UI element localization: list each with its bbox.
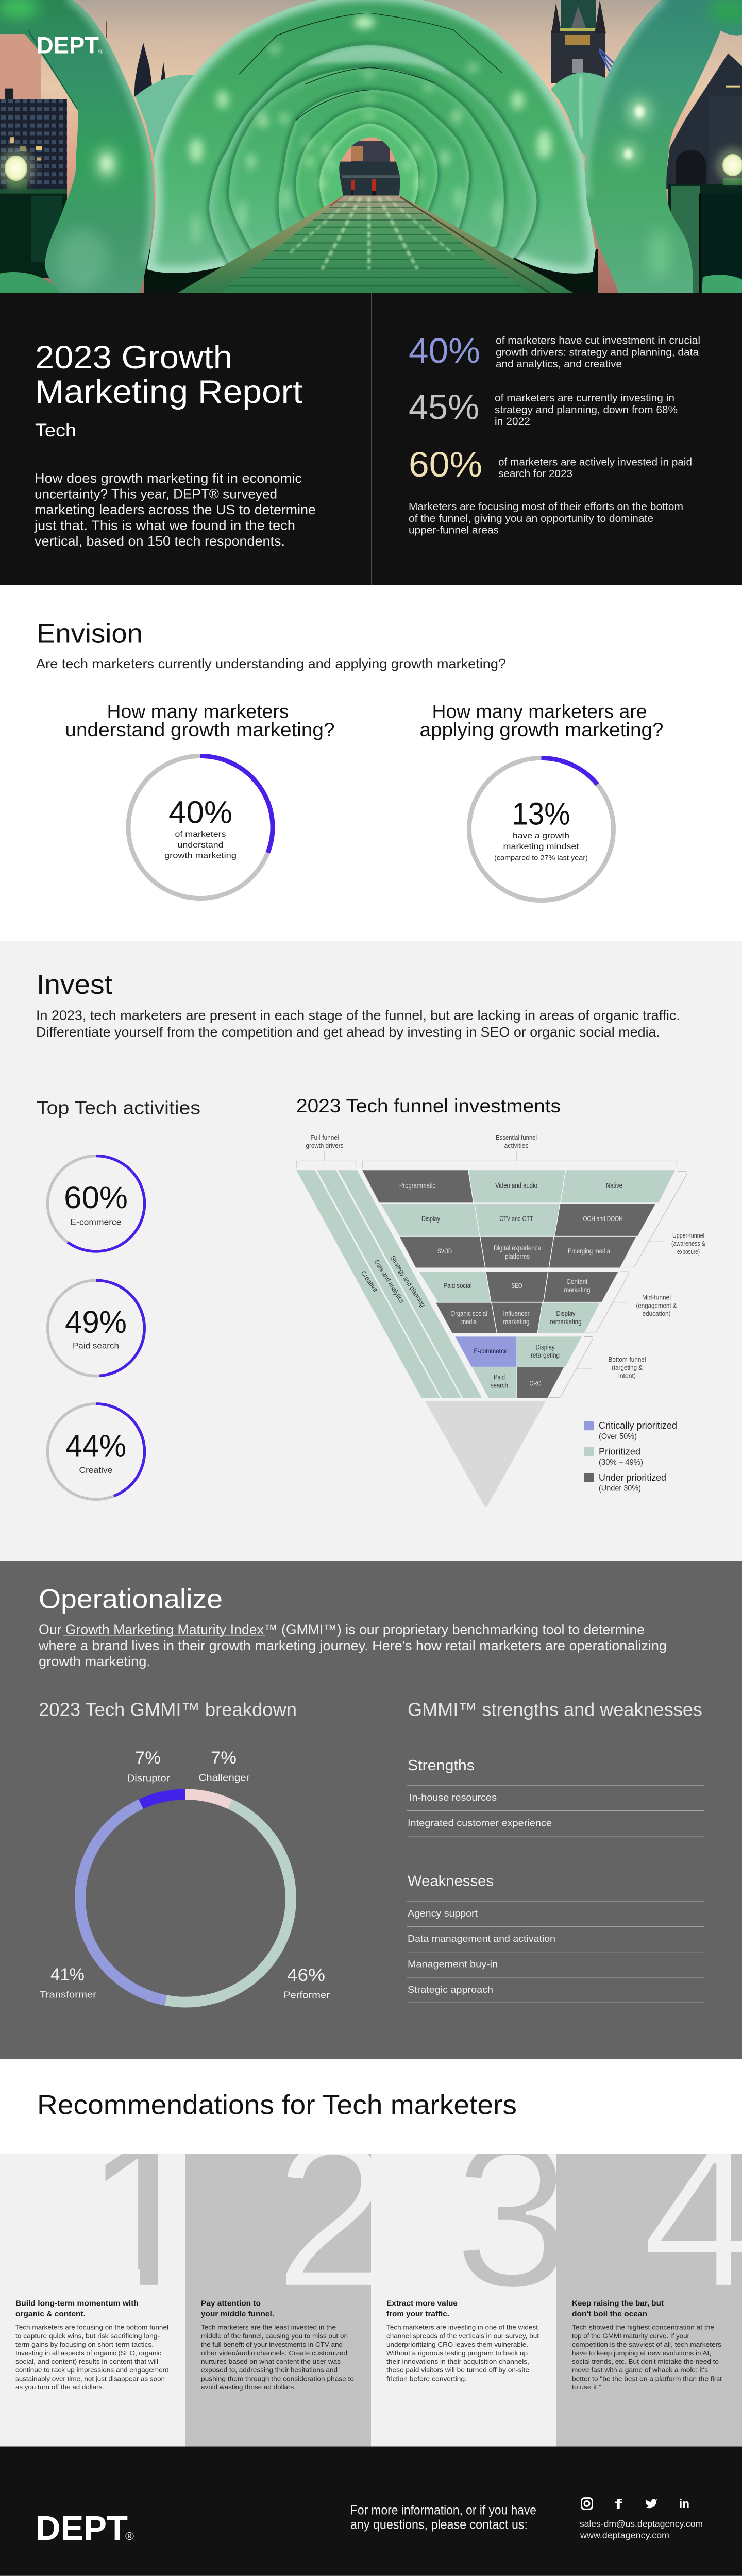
funnel top labels: growth drivers: [306, 1142, 343, 1149]
donut labels: 46%: [287, 1965, 325, 1985]
cell labels on light: Paid social: [443, 1281, 472, 1290]
hero logo: ®: [98, 49, 103, 55]
recommendation 1: sustainably over time, not just disappear as soon: [15, 2375, 165, 2382]
section intro: Are tech marketers currently understanding and applying growth marketing?: [36, 657, 506, 671]
icon: linkedin: in: [679, 2497, 689, 2511]
funnel top labels: [306, 1133, 537, 1149]
cell labels on light: search: [491, 1381, 508, 1389]
recommendation 2: pushing them through the consideration phase to: [201, 2375, 354, 2382]
funnel side labels: (targeting &: [612, 1364, 643, 1371]
cell labels on dark: SVOD: [437, 1247, 452, 1255]
cell labels on light: Display: [421, 1214, 440, 1223]
stat: 60%: [409, 444, 692, 484]
funnel top labels: Essential funnel: [496, 1133, 537, 1141]
subheading: strengths and weaknesses: GMMI™ strengths and weaknesses: [408, 1699, 702, 1720]
critically prioritized cell: [455, 1336, 516, 1367]
intro paragraph: just that. This is what we found in the tech: [34, 519, 295, 533]
walkway: [178, 196, 573, 293]
recommendation 1: organic & content.: [15, 2310, 86, 2318]
progress ring: creative 44%: Creative: [79, 1465, 112, 1475]
funnel side labels: education): [642, 1310, 670, 1317]
recommendation 2: Pay attention to: [201, 2299, 261, 2308]
hero logo: DEPT: [37, 32, 99, 58]
section intro: In 2023, tech marketers are present in each stage of the funnel, but are lacking in areas of organic traffic.: [36, 1008, 680, 1023]
donut labels: Disruptor: [127, 1773, 170, 1784]
takeaway text: of the funnel, giving you an opportunity to dominate: [409, 513, 653, 524]
cell labels on light: Video and audio: [495, 1181, 537, 1190]
takeaway text: [409, 501, 683, 536]
funnel side labels: intent): [618, 1372, 636, 1380]
heading: Envision: [37, 618, 143, 649]
donut labels: 7%: [135, 1748, 161, 1768]
chart heading: applying: [419, 701, 664, 740]
recommendation 3: Tech marketers are investing in one of the widest: [386, 2324, 538, 2331]
subheading: funnel: 2023 Tech funnel investments: [296, 1095, 561, 1116]
recommendation 1: social, and content) results in content that will: [15, 2358, 158, 2365]
stat: 40%: of marketers have cut investment in crucial: [496, 335, 700, 347]
cell labels on light: Paid: [494, 1373, 505, 1381]
recommendation 3: 3: [453, 2098, 571, 2331]
strengths list: Integrated customer experience: [408, 1817, 552, 1828]
stat: 40%: 40%: [409, 331, 480, 370]
intro paragraph: marketing leaders across the US to determine: [35, 503, 316, 517]
donut chart: GMMI breakdown: [80, 1794, 291, 2002]
recommendation 3: friction before converting.: [386, 2375, 467, 2382]
donut chart: 40% understand: growth marketing: [164, 852, 237, 860]
full-funnel growth driver strips: [296, 1170, 482, 1398]
recommendation 2: your middle funnel.: [201, 2310, 274, 2318]
funnel side labels: [608, 1231, 705, 1380]
recommendation 1: Build long-term momentum with: [15, 2299, 139, 2308]
cell labels on dark: CRO: [529, 1379, 542, 1387]
cell labels on dark: Emerging media: [568, 1247, 610, 1255]
Tower Bridge tower: [551, 0, 616, 83]
weaknesses list: Weaknesses: [408, 1873, 494, 1890]
cell labels on dark: [399, 1181, 622, 1387]
stat: 45%: in 2022: [495, 416, 530, 427]
subtitle: Tech: [35, 420, 76, 440]
contact prompt: any questions, please contact us:: [350, 2518, 528, 2532]
weaknesses list: Data management and activation: [408, 1933, 555, 1944]
cell labels on light: Display: [536, 1343, 555, 1351]
tube glow spots: [190, 16, 551, 244]
recommendation 1: [0, 2096, 202, 2447]
strip labels: Creative: [360, 1269, 380, 1293]
progress ring: paid search 49%: [47, 1280, 144, 1376]
strengths list: [407, 1757, 704, 1836]
recommendation 4: social trends, etc. But don't mistake the need to: [572, 2358, 719, 2365]
recommendation 1: to capture quick wins, but risk sacrificing long-: [15, 2332, 160, 2340]
recommendation 4: top of the GMMI maturity curve. If your: [572, 2332, 690, 2340]
recommendation 2: [185, 2154, 371, 2446]
recommendation 3: from your traffic.: [386, 2310, 449, 2318]
recommendation 2: the full benefit of your investments in CTV and: [201, 2341, 343, 2348]
legend: Under prioritized: [599, 1472, 666, 1483]
section intro: where a brand lives in their growth marketing journey. Here's how retail marketers are operationalizing: [38, 1639, 667, 1653]
donut chart: 40% understand: of marketers: [175, 830, 226, 839]
title: 2023 Growth: [35, 339, 232, 376]
funnel side labels: exposure): [677, 1248, 700, 1256]
big right tube: [585, 0, 742, 295]
recommendation 2: middle of the funnel, causing you to miss out on: [201, 2332, 348, 2340]
heading: Invest: [37, 969, 112, 1000]
cell labels on light: [421, 1181, 622, 1389]
tunnel opening: [339, 137, 400, 196]
tube seam lines: [239, 13, 502, 121]
stat: 40%: and analytics, and creative: [496, 358, 622, 370]
recommendation 3: these paid visitors will be turned off by on-site: [386, 2366, 529, 2374]
inflatable tunnel arches: [147, 0, 596, 274]
prioritized cells: [381, 1170, 675, 1398]
left spires: [106, 21, 168, 96]
cell labels on light: E-commerce: [474, 1347, 508, 1355]
progress ring: paid search 49%: Paid search: [73, 1341, 119, 1350]
legend: (Over 50%): [599, 1432, 637, 1441]
hero image: inflatable green tunnel on a bridge at dusk: [0, 0, 742, 295]
funnel side labels: Bottom-funnel: [608, 1355, 646, 1363]
recommendation 1: 1: [85, 2096, 202, 2329]
legend: Prioritized: [599, 1446, 640, 1456]
recommendation 1: as you turn off the ad dollars.: [15, 2383, 104, 2391]
recommendation 4: [556, 2154, 742, 2446]
heading: Operationalize: [39, 1584, 223, 1614]
chart heading: understand: understand growth marketing?: [65, 719, 335, 740]
funnel top labels: Full-funnel: [310, 1133, 339, 1141]
intro paragraph: vertical, based on 150 tech respondents.: [35, 534, 285, 549]
panel: intro dark band: [0, 293, 742, 585]
recommendation 4: competition is the savviest of all, tech marketers: [572, 2341, 721, 2348]
strip labels: [360, 1255, 427, 1308]
stat: 45%: of marketers are currently investing in: [495, 392, 674, 404]
recommendation 2: nurtures based on what content the user was: [201, 2358, 341, 2365]
donut labels: [40, 1748, 330, 2001]
funnel brackets: [296, 1151, 687, 1398]
footer logo: DEPT: [36, 2509, 128, 2548]
cell labels on dark: SEO: [511, 1281, 522, 1290]
donut labels: Transformer: [40, 1989, 96, 2000]
title: [35, 339, 302, 410]
donut chart: 13% applying: 13%: [512, 796, 570, 832]
cell labels on dark: Influencer: [503, 1309, 530, 1317]
donut labels: 7%: [211, 1748, 237, 1768]
cell labels on light: retargeting: [531, 1351, 560, 1359]
left background building: [0, 89, 67, 196]
chart heading: applying: How many marketers are: [432, 701, 647, 722]
strip labels: Strategy and planning: [389, 1255, 427, 1308]
donut labels: Challenger: [199, 1772, 250, 1783]
legend: [584, 1420, 677, 1493]
recommendation 4: don't boil the ocean: [572, 2310, 647, 2318]
donut chart: 13% applying: marketing mindset: [503, 842, 579, 851]
progress ring: creative 44%: [47, 1404, 144, 1499]
cell labels on dark: Programmatic: [399, 1181, 435, 1190]
donut chart: 40% understand: 40%: [168, 795, 232, 831]
strengths list: In-house resources: [409, 1792, 497, 1803]
cell labels on light: Native: [606, 1181, 622, 1190]
legend: Critically prioritized: [599, 1420, 677, 1431]
right background building: [665, 54, 742, 189]
recommendation 3: Extract more value: [386, 2299, 458, 2308]
section intro: [36, 1008, 680, 1040]
panel: Recommendations section: [0, 2059, 742, 2447]
progress ring: e-commerce 60%: [47, 1156, 145, 1251]
panel: Invest section: [0, 941, 742, 1561]
recommendation 2: 2: [274, 2098, 392, 2331]
cell labels on dark: Organic social: [450, 1309, 487, 1317]
recommendation 3: [371, 2154, 556, 2446]
cell labels on light: remarketing: [550, 1317, 581, 1326]
recommendation 2: exposed to, addressing their hesitations and: [201, 2366, 338, 2374]
cell labels on dark: media: [461, 1317, 477, 1326]
donut labels: Performer: [283, 1990, 330, 2001]
recommendation 3: channel spreads of the verticals in our survey, but: [386, 2332, 539, 2340]
donut chart: 40% understand: [128, 756, 273, 899]
subheading: breakdown: 2023 Tech GMMI™ breakdown: [39, 1699, 297, 1720]
takeaway text: upper-funnel areas: [409, 524, 499, 536]
stat: 45%: [409, 387, 678, 427]
heading: Recommendations for Tech marketers: [37, 2090, 517, 2120]
progress ring: e-commerce 60%: 60%: [64, 1180, 128, 1215]
donut chart: 13% applying: [469, 758, 613, 901]
stat: 40%: growth drivers: strategy and planning, data: [496, 346, 699, 358]
progress ring: paid search 49%: 49%: [65, 1304, 127, 1340]
panel: Operationalize section: [0, 1561, 742, 2059]
funnel top labels: activities: [504, 1142, 529, 1149]
progress ring: e-commerce 60%: E-commerce: [70, 1217, 121, 1227]
section intro: [38, 1623, 667, 1669]
stat: 60%: search for 2023: [498, 468, 572, 480]
section intro: Differentiate yourself from the competition and get ahead by investing in SEO or organic social media.: [36, 1025, 660, 1040]
donut labels: 41%: [50, 1965, 85, 1985]
recommendation 1: term gains by focusing on short-term tactics.: [15, 2341, 154, 2348]
chart heading: applying: applying growth marketing?: [419, 719, 663, 740]
intro paragraph: uncertainty? This year, DEPT® surveyed: [35, 487, 277, 501]
funnel side labels: Mid-funnel: [642, 1294, 671, 1301]
chart heading: understand: How many marketers: [107, 701, 289, 722]
legend: (30% – 49%): [599, 1458, 643, 1467]
funnel chart: [296, 1133, 705, 1506]
cell labels on dark: platforms: [505, 1252, 530, 1260]
takeaway text: Marketers are focusing most of their efforts on the bottom: [409, 501, 683, 513]
icon: facebook: f: [615, 2496, 622, 2512]
panel: Envision section: [0, 585, 742, 941]
small background arches: [135, 73, 609, 158]
section intro: growth marketing.: [39, 1655, 150, 1669]
funnel tip triangle: [427, 1402, 544, 1506]
icon: instagram: [581, 2498, 593, 2509]
subheading: top activities: Top Tech activities: [37, 1097, 200, 1118]
recommendation 3: underprioritizing CRO leaves them vulnerable.: [386, 2341, 528, 2348]
chart heading: understand: [65, 701, 335, 740]
donut chart: 13% applying: (compared to 27% last year): [494, 854, 588, 862]
stat: 45%: strategy and planning, down from 68%: [495, 404, 678, 416]
left and right fences, lamps: [0, 148, 742, 293]
cell labels on light: CTV and OTT: [500, 1214, 533, 1223]
cell labels on dark: OOH and DOOH: [583, 1214, 623, 1223]
stat: 60%: of marketers are actively invested in paid: [498, 456, 692, 468]
stat: 45%: 45%: [409, 387, 479, 427]
section intro: Our Growth Marketing Maturity Index™ (GMMI™) is our proprietary benchmarking tool to determine: [39, 1623, 645, 1637]
weaknesses list: Management buy-in: [408, 1959, 498, 1970]
recommendation 4: Keep raising the bar, but: [572, 2299, 664, 2308]
recommendation 1: continue to rack up impressions and engagement: [15, 2366, 168, 2374]
recommendation 4: move fast with a game of whack a mole: it's: [572, 2366, 708, 2374]
strip labels: Data and analytics: [373, 1258, 406, 1304]
recommendation 2: other video/audio channels. Create customized: [201, 2349, 347, 2357]
strengths list: Strengths: [408, 1757, 475, 1774]
stat: 60%: 60%: [409, 444, 482, 484]
contact details: [580, 2518, 703, 2540]
contact prompt: [350, 2504, 536, 2532]
icon: twitter: [645, 2499, 657, 2508]
recommendation 4: have to keep jumping at new evolutions in AI,: [572, 2349, 711, 2357]
progress ring: creative 44%: 44%: [65, 1429, 126, 1464]
recommendation 3: their innovations in their acquisition channels,: [386, 2358, 529, 2365]
stat: 40%: [409, 331, 700, 370]
recommendation 4: better to "be the best on a platform than the first: [572, 2375, 722, 2382]
cell labels on light: Display: [556, 1309, 576, 1317]
recommendation 2: avoid wasting those ad dollars.: [201, 2383, 296, 2391]
under prioritized cells: [362, 1170, 655, 1398]
recommendation 3: Without a rigorous testing program to back up: [386, 2349, 528, 2357]
intro paragraph: How does growth marketing fit in economic: [35, 471, 302, 486]
weaknesses list: [407, 1873, 704, 2003]
recommendation 1: Investing in all aspects of organic (SEO, organic: [15, 2349, 161, 2357]
contact details: www.deptagency.com: [580, 2530, 669, 2540]
funnel side labels: (engagement &: [636, 1302, 677, 1309]
recommendation 4: to use it.": [572, 2383, 601, 2391]
cell labels on dark: marketing: [503, 1317, 530, 1326]
cell labels on dark: Content: [566, 1277, 588, 1285]
footer logo: ®: [125, 2530, 134, 2543]
cell labels on dark: marketing: [564, 1285, 590, 1294]
cell labels on dark: Digital experience: [494, 1244, 541, 1252]
intro paragraph: [34, 471, 316, 549]
donut chart: 40% understand: understand: [177, 841, 223, 850]
recommendation 1: Tech marketers are focusing on the bottom funnel: [15, 2324, 168, 2331]
recommendation 2: Tech marketers are the least invested in the: [201, 2324, 336, 2331]
donut chart: 13% applying: have a growth: [513, 832, 569, 840]
contact prompt: For more information, or if you have: [350, 2504, 536, 2518]
recommendation 4: Tech showed the highest concentration at the: [572, 2324, 714, 2331]
funnel side labels: Upper-funnel: [672, 1231, 704, 1239]
funnel side labels: (awareness &: [671, 1240, 705, 1247]
footer: [0, 2447, 742, 2576]
contact details: sales-dm@us.deptagency.com: [580, 2518, 703, 2529]
big left tube: [0, 0, 154, 295]
title: Marketing Report: [35, 374, 302, 410]
weaknesses list: Agency support: [408, 1908, 478, 1919]
weaknesses list: Strategic approach: [408, 1984, 493, 1995]
legend: (Under 30%): [599, 1484, 641, 1493]
